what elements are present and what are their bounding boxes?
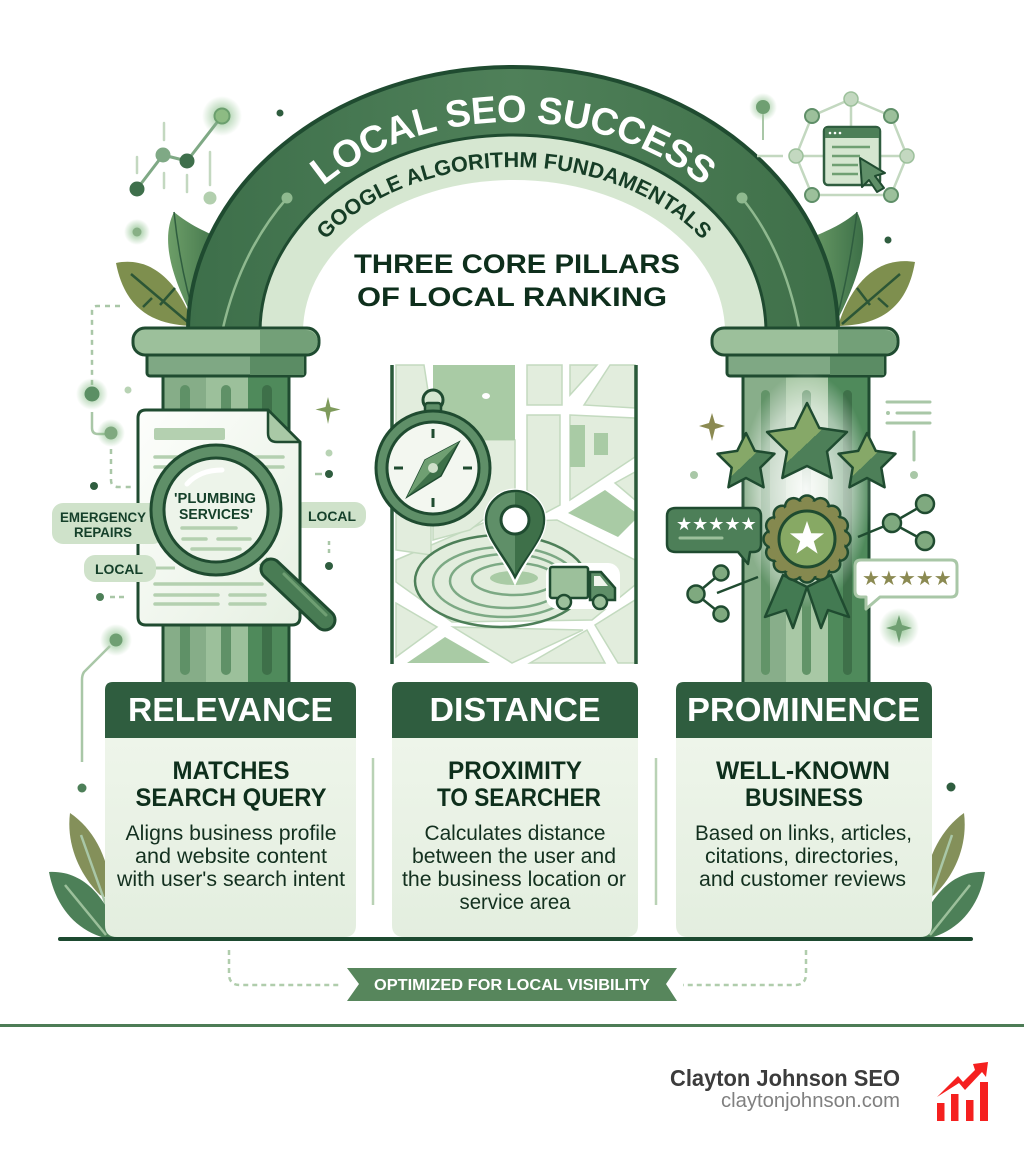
magnifier lens: 'PLUMBING [174, 490, 256, 507]
left pillar [133, 328, 319, 685]
prominence body: citations, directories, [705, 844, 899, 868]
decoration: left connector nodes [76, 306, 340, 792]
decoration: bottom leaves right [915, 813, 985, 938]
pill: emergency repairs [52, 503, 164, 544]
magnifier handle [263, 561, 326, 620]
panel: relevance [105, 682, 356, 937]
relevance body [116, 821, 345, 891]
decoration: bottom leaves left [49, 813, 120, 938]
footer brand [670, 1065, 900, 1112]
pill: local left: LOCAL [95, 561, 143, 577]
distance header: DISTANCE [430, 691, 600, 728]
distance subheading [437, 757, 601, 812]
icon: three rating stars [718, 403, 896, 487]
icon: compass [376, 390, 490, 525]
prominence header: PROMINENCE [687, 691, 920, 728]
relevance body: Aligns business profile [126, 821, 336, 845]
review bubble light: ★★★★★ [862, 568, 952, 590]
arch inner light band [260, 135, 766, 332]
footer brand: Clayton Johnson SEO [670, 1065, 900, 1091]
pill: local right: LOCAL [308, 508, 356, 524]
icon: network and browser top right [749, 92, 914, 244]
decoration: leaves top right [805, 212, 915, 326]
relevance body: and website content [135, 844, 327, 868]
heading: three core pillars: OF LOCAL RANKING [357, 282, 667, 312]
prominence body [695, 821, 912, 891]
relevance body: with user's search intent [116, 867, 345, 891]
distance subheading: PROXIMITY [448, 757, 582, 785]
review bubble dark [667, 508, 761, 564]
relevance header [105, 682, 356, 738]
prominence body: Based on links, articles, [695, 821, 912, 845]
distance body: Calculates distance [424, 821, 606, 845]
heading: three core pillars: THREE CORE PILLARS [354, 249, 680, 279]
panel: distance [392, 682, 638, 937]
arch outer band [188, 67, 838, 332]
relevance subheading: SEARCH QUERY [136, 784, 327, 812]
dashed connectors [229, 950, 806, 985]
pill: local left [84, 555, 156, 582]
icon: truck [546, 563, 620, 609]
magnifier lens: SERVICES' [179, 506, 253, 523]
prominence body: and customer reviews [699, 867, 906, 891]
arch subtitle: GOOGLE ALGORITHM FUNDAMENTALS [318, 152, 711, 238]
distance body: between the user and [412, 844, 616, 868]
decoration: leaves top left [116, 212, 225, 326]
banner: optimized for local visibility [347, 968, 677, 1001]
distance body: service area [460, 890, 571, 914]
icon: award badge [764, 496, 850, 628]
decoration: growth chart top left [124, 96, 284, 245]
prominence subheading [716, 757, 890, 812]
ripples [415, 535, 587, 627]
panel: map [392, 365, 636, 664]
heading: three core pillars [354, 249, 680, 312]
arch title: LOCAL SEO SUCCESS [309, 95, 714, 184]
magnifier lens [151, 445, 281, 575]
logo: red chart [937, 1062, 988, 1121]
relevance header: RELEVANCE [128, 691, 333, 728]
relevance subheading [136, 757, 327, 812]
icon: share network left [688, 566, 758, 622]
footer brand: claytonjohnson.com [721, 1090, 900, 1112]
prominence header [676, 682, 932, 738]
base line [58, 937, 973, 941]
icon: share network right [858, 495, 934, 550]
document [138, 410, 300, 625]
footer divider [0, 1024, 1024, 1027]
relevance subheading: MATCHES [172, 757, 290, 785]
distance body [402, 821, 626, 914]
decoration: right sparkles and lines [690, 402, 956, 792]
panel: prominence [676, 682, 932, 937]
pill: emergency repairs: EMERGENCY [60, 510, 146, 525]
card separators [373, 758, 656, 905]
right pillar [712, 328, 898, 685]
prominence subheading: WELL-KNOWN [716, 757, 890, 785]
prominence subheading: BUSINESS [745, 784, 863, 812]
banner: optimized for local visibility: OPTIMIZED FOR LOCAL VISIBILITY [374, 977, 651, 994]
pill: local right [292, 502, 366, 528]
distance header [392, 682, 638, 738]
review bubble dark: ★★★★★ [676, 514, 757, 534]
review bubble light [855, 560, 957, 609]
distance subheading: TO SEARCHER [437, 784, 601, 812]
icon: location pin [486, 491, 544, 580]
distance body: the business location or [402, 867, 626, 891]
arch [186, 65, 840, 326]
icon: magnifier [151, 445, 326, 620]
pill: emergency repairs: REPAIRS [74, 525, 132, 540]
